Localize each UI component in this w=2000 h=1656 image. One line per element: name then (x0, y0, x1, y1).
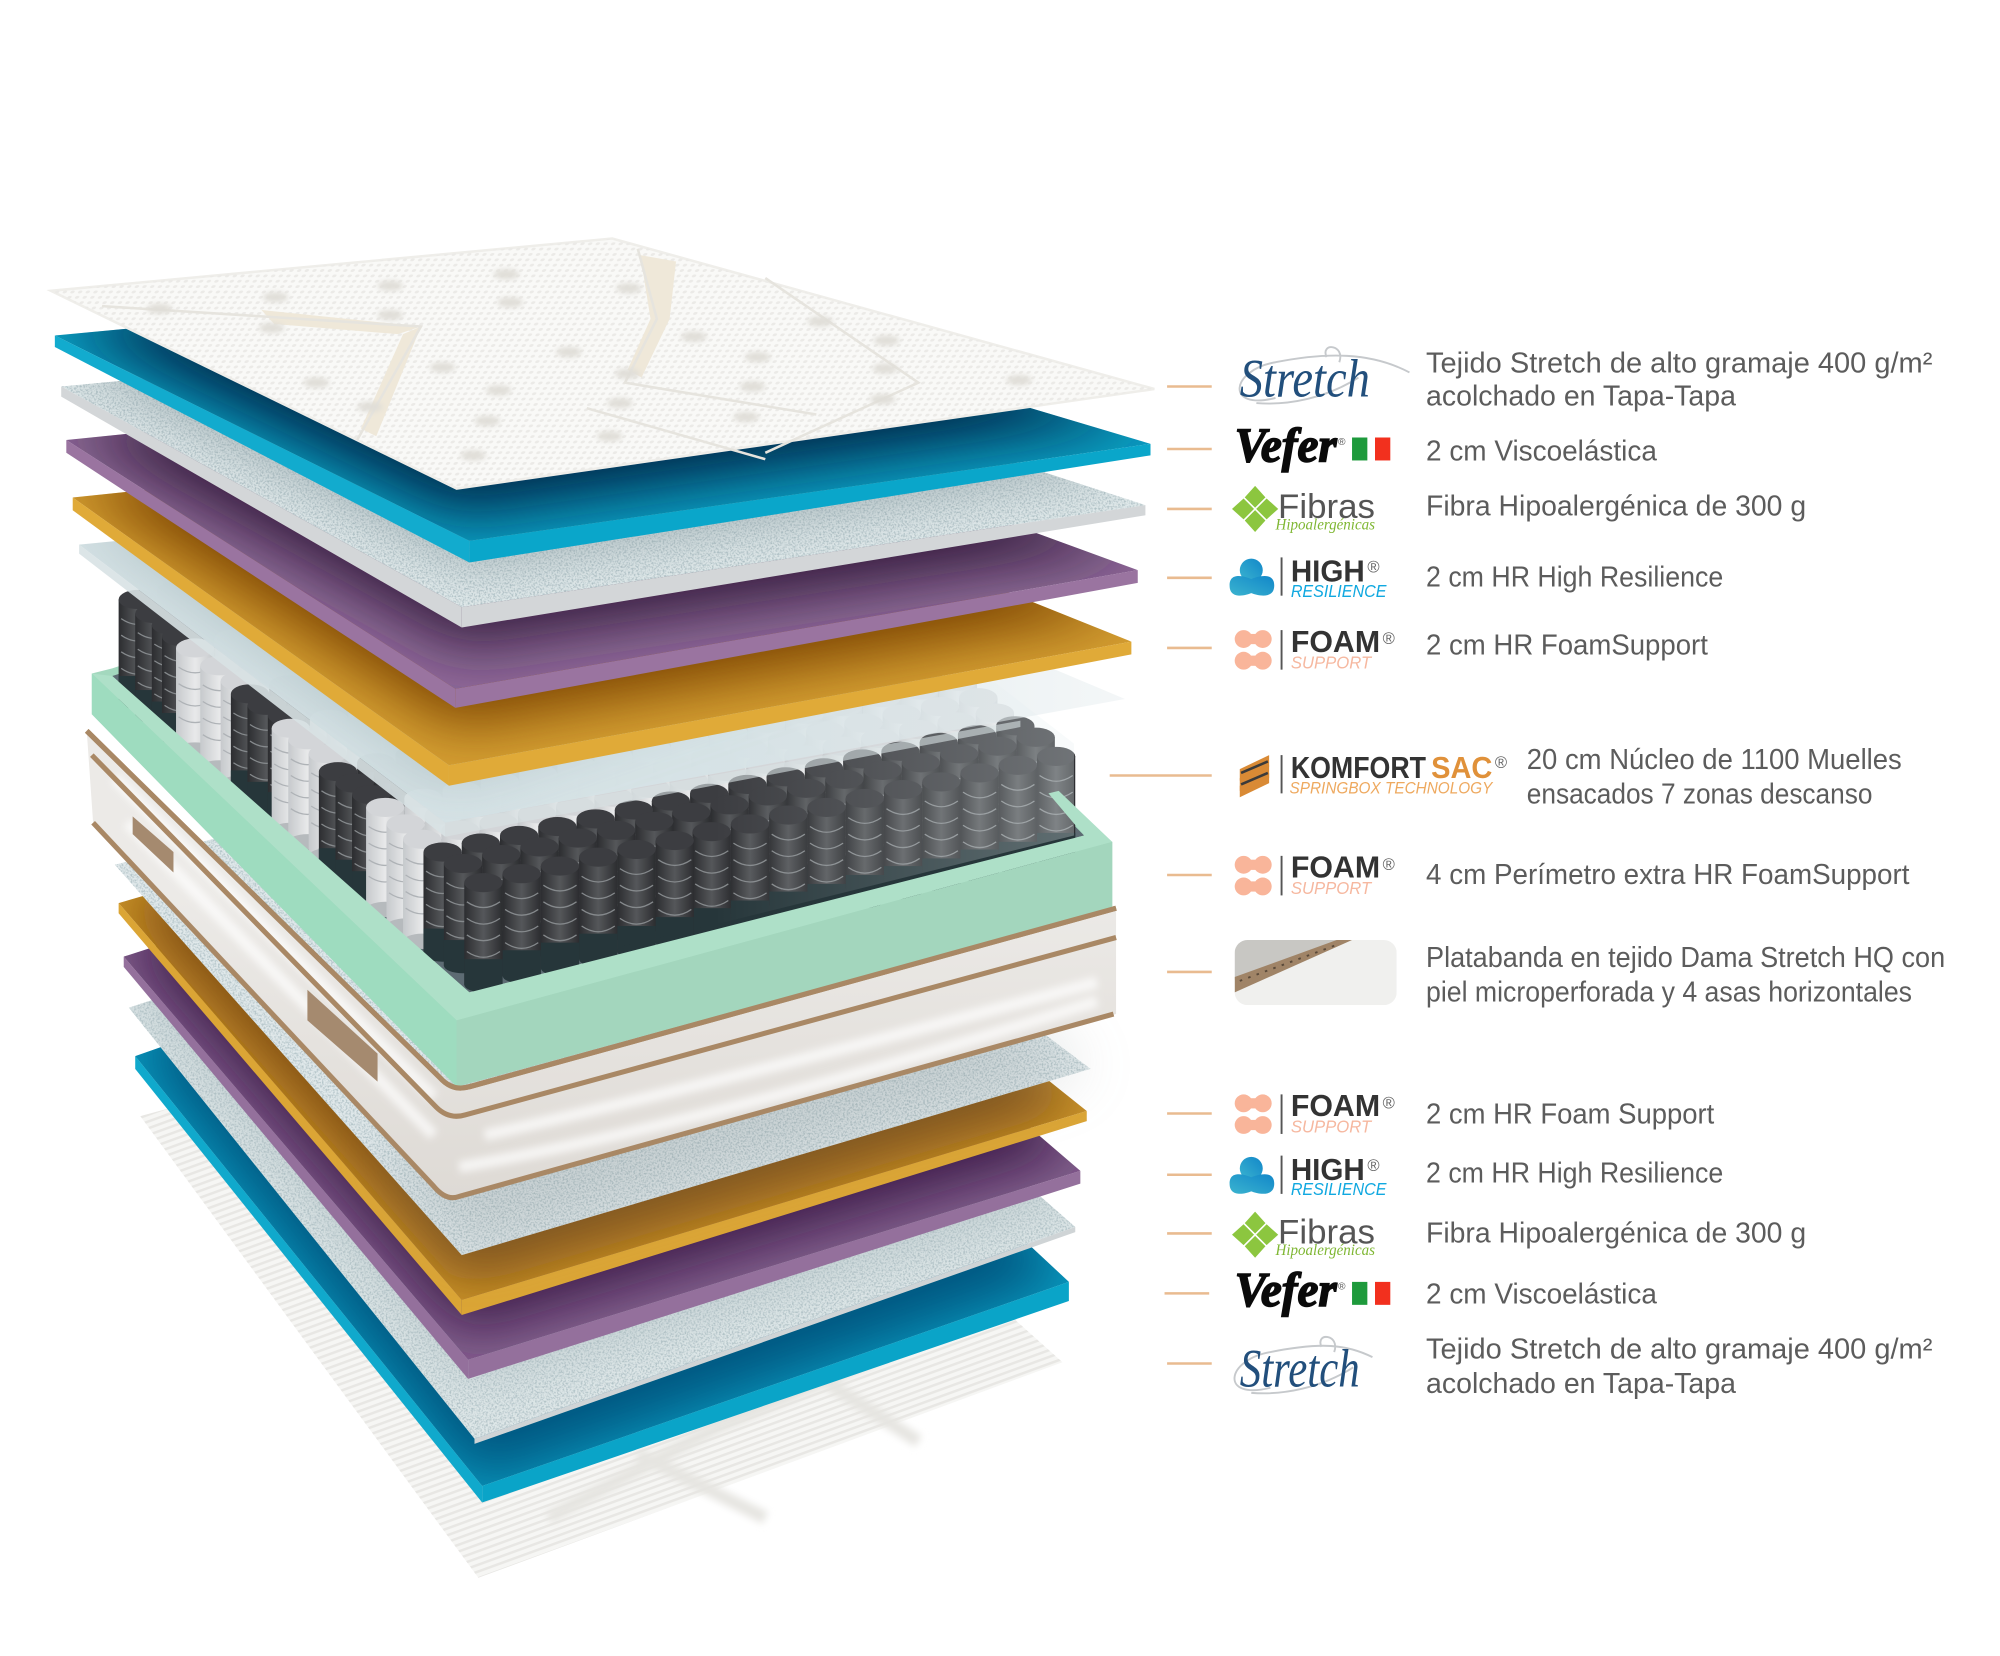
logo: FOAM Support: ® (1383, 629, 1395, 648)
description: 2 cm HR High Resilience (1426, 1157, 1723, 1189)
row: FOAM Support bottom (1235, 1089, 1714, 1137)
description (1426, 1333, 1932, 1400)
logo: HIGH Resilience: ® (1367, 558, 1380, 577)
tufts (147, 269, 1032, 460)
panel: quilted side band (87, 731, 1116, 1198)
layer: bottom stretch fabric (140, 982, 1062, 1578)
logo: Stretch: Stretch (1240, 349, 1370, 409)
row: FOAM Support top (1235, 625, 1708, 672)
mattress exploded diagram (51, 239, 1154, 1578)
layer: bottom translucent gray (115, 727, 1091, 1255)
logo: Komfort Sac: SPRINGBOX TECHNOLOGY (1290, 778, 1494, 797)
logo: Komfort Sac: KOMFORT (1291, 751, 1426, 785)
row: HIGH Resilience top (1230, 555, 1723, 601)
logo: FOAM Support (1235, 625, 1395, 672)
tan seam strips (261, 255, 676, 436)
description: ensacados 7 zonas descanso (1527, 779, 1872, 811)
logo: Vefer with Italian flag (1235, 1264, 1390, 1317)
logo: Komfort Sac: ® (1495, 753, 1507, 772)
description (1426, 347, 1932, 413)
handle labels (133, 816, 378, 1082)
description: acolchado en Tapa-Tapa (1426, 1368, 1736, 1400)
logo: Fibras Hipoalergénicas (1231, 1210, 1375, 1259)
description: 2 cm Viscoelástica (1426, 435, 1657, 467)
logo: Komfort Sac: SAC (1431, 751, 1492, 785)
description: Tejido Stretch de alto gramaje 400 g/m² (1426, 347, 1932, 379)
row: Fibras top (1231, 485, 1806, 533)
photo: fabric band sample (1235, 940, 1397, 1005)
description: 4 cm Perímetro extra HR FoamSupport (1426, 859, 1909, 891)
logo: Vefer with Italian flag: ® (1338, 437, 1346, 448)
layer: translucent top gray (79, 540, 1124, 836)
logo: Fibras Hipoalergénicas: Fibras (1278, 1214, 1375, 1252)
pocket springs, seven zones (119, 464, 1075, 992)
logo: FOAM Support: ® (1383, 1093, 1395, 1112)
logo: Stretch: Stretch (1240, 1338, 1360, 1398)
layer: top gray hypoallergenic fibre (61, 379, 1146, 628)
logo: Vefer with Italian flag: ® (1338, 1282, 1346, 1293)
logo: HIGH Resilience (1230, 555, 1387, 601)
green perimeter back (92, 497, 1112, 1087)
layer: top purple high resilience (66, 432, 1138, 708)
logo: HIGH Resilience: HIGH (1291, 555, 1365, 589)
layer: bottom gold foam support (118, 896, 1087, 1315)
row: Komfort Sac (1240, 744, 1902, 811)
logo: FOAM Support: SUPPORT (1291, 652, 1372, 672)
logo: Fibras Hipoalergénicas: Hipoalergénicas (1275, 1242, 1375, 1259)
panel: pocket spring core (92, 464, 1112, 1087)
logo: FOAM Support: FOAM (1291, 851, 1380, 885)
description: Platabanda en tejido Dama Stretch HQ con (1426, 942, 1945, 974)
logo: FOAM Support: FOAM (1291, 1089, 1380, 1123)
logo: HIGH Resilience (1230, 1153, 1387, 1199)
row: FOAM perimeter (1235, 851, 1909, 898)
logo: Fibras Hipoalergénicas: Fibras (1278, 488, 1375, 526)
logo: Vefer with Italian flag: Vefer (1235, 1264, 1338, 1317)
row: Fibras bottom (1231, 1210, 1806, 1259)
layer: bottom purple high resilience (124, 946, 1080, 1379)
logo: HIGH Resilience: RESILIENCE (1291, 1179, 1387, 1199)
description (1527, 744, 1902, 811)
logo: HIGH Resilience: RESILIENCE (1291, 581, 1387, 601)
logo: FOAM Support (1235, 851, 1395, 898)
row: Vefer bottom (1235, 1264, 1657, 1317)
logo: HIGH Resilience: ® (1367, 1156, 1380, 1175)
description: Fibra Hipoalergénica de 300 g (1426, 490, 1806, 522)
row: Vefer top (1235, 420, 1657, 473)
tan piping (87, 731, 1116, 1198)
tan piping over green base (87, 731, 1116, 1088)
row: Stretch bottom (1234, 1333, 1932, 1400)
row: Stretch top (1240, 347, 1932, 413)
layer: bottom gray hypoallergenic fibre (129, 998, 1076, 1444)
description: 2 cm Viscoelástica (1426, 1279, 1657, 1311)
connector lines (1110, 386, 1212, 1364)
row: Platabanda (1235, 940, 1945, 1008)
description: 2 cm HR FoamSupport (1426, 629, 1708, 661)
logo: FOAM Support: SUPPORT (1291, 878, 1372, 898)
quilting seams (102, 249, 918, 459)
logo: Komfort Sac (1240, 751, 1507, 797)
description: acolchado en Tapa-Tapa (1426, 381, 1736, 413)
pale haze over far springs (714, 682, 1074, 925)
layer: bottom blue viscoelastic (135, 1047, 1069, 1502)
layer: top stretch quilted fabric (51, 239, 1154, 489)
logo: FOAM Support (1235, 1089, 1395, 1137)
description: piel microperforada y 4 asas horizontales (1426, 976, 1912, 1008)
fabric folds (115, 778, 1097, 1167)
green rim and front faces (92, 673, 1112, 1087)
layer: top gold foam support (72, 490, 1132, 786)
logo: FOAM Support: ® (1383, 855, 1395, 874)
description: 2 cm HR Foam Support (1426, 1099, 1714, 1131)
logo: Vefer with Italian flag: Vefer (1235, 420, 1338, 473)
description: 2 cm HR High Resilience (1426, 562, 1723, 594)
description: Fibra Hipoalergénica de 300 g (1426, 1217, 1806, 1249)
core floor (112, 510, 1084, 992)
description (1426, 942, 1945, 1008)
logo: HIGH Resilience: HIGH (1291, 1153, 1365, 1187)
description: 20 cm Núcleo de 1100 Muelles (1527, 744, 1902, 776)
logo: Vefer with Italian flag (1235, 420, 1390, 473)
layer: top blue viscoelastic (54, 328, 1150, 562)
logo: FOAM Support: SUPPORT (1291, 1117, 1372, 1137)
logo: Fibras Hipoalergénicas (1231, 485, 1375, 533)
row: HIGH Resilience bottom (1230, 1153, 1723, 1199)
logo: Fibras Hipoalergénicas: Hipoalergénicas (1275, 516, 1375, 533)
description: Tejido Stretch de alto gramaje 400 g/m² (1426, 1333, 1932, 1365)
logo: FOAM Support: FOAM (1291, 625, 1380, 659)
